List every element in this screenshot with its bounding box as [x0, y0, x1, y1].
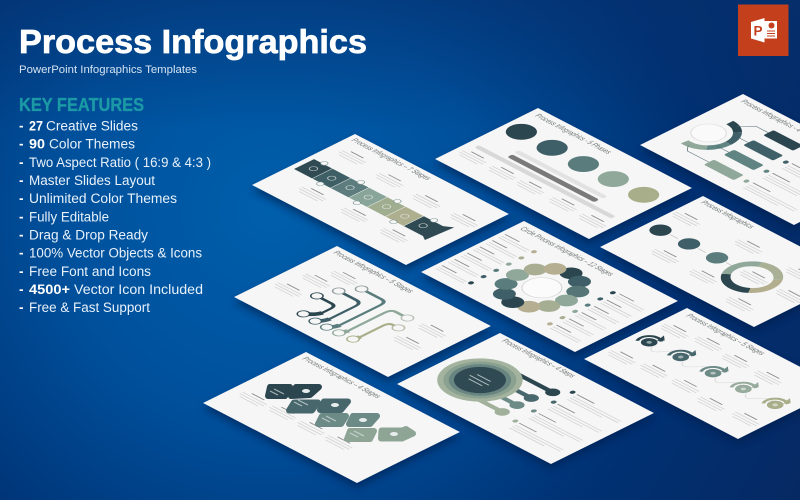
arc diagram — [660, 107, 768, 162]
stage dots — [467, 250, 617, 326]
step band — [290, 157, 454, 241]
feature: color themes: Color Themes — [49, 136, 135, 152]
feature: color themes: 90 — [29, 136, 45, 152]
panel: circle 12 stages slide — [421, 221, 678, 352]
feature: unlimited themes: Unlimited Color Themes — [29, 191, 177, 206]
feature: master slides: - — [19, 173, 24, 188]
slide title: Process Infographics – 4 Stages — [300, 356, 384, 399]
panel: 7 stages slide — [252, 134, 509, 265]
text blocks — [455, 149, 611, 229]
stage icons — [632, 329, 798, 415]
panel: path stages slide — [234, 246, 491, 377]
step boxes — [704, 130, 800, 180]
panel: 5 phases slide — [435, 108, 692, 239]
panel: 4 steps arc slide — [640, 94, 800, 225]
heading: key features: KEY FEATURES — [19, 95, 144, 115]
feature: color themes: - — [19, 136, 24, 152]
feature: drag and drop: Drag & Drop Ready — [29, 228, 148, 242]
slide title: Process Infographics – 5 Stages — [684, 313, 768, 356]
panel: 5 stages icons slide — [584, 308, 800, 439]
feature: vector icons: 4500+ — [29, 282, 70, 297]
feature: free font: - — [19, 264, 24, 279]
text blocks — [605, 320, 800, 429]
feature: aspect ratio: Two Aspect Ratio ( 16:9 & 4:3 ) — [29, 155, 211, 170]
feature list — [19, 118, 211, 315]
feature: editable: Fully Editable — [29, 210, 109, 224]
center circle — [514, 273, 570, 302]
title: Process Infographics — [19, 23, 367, 60]
feature: creative slides: 27 — [29, 118, 43, 134]
feature: creative slides: Creative Slides — [46, 118, 138, 134]
slide title: Process Infographics — [698, 199, 757, 230]
phase circles — [499, 120, 666, 206]
concentric circles — [420, 349, 540, 411]
feature: master slides: Master Slides Layout — [29, 173, 155, 188]
slide title: Process Infographics – 5 Stages — [331, 250, 416, 294]
feature: support: Free & Fast Support — [29, 300, 150, 315]
slide title: Process Infographics - 5 Phases — [533, 113, 615, 155]
icon: powerpoint — [738, 4, 788, 56]
text blocks — [613, 208, 800, 321]
slide title: Process Infographics – 4 Steps — [499, 338, 578, 379]
arms — [454, 365, 563, 420]
feature: free font: Free Font and Icons — [29, 264, 151, 279]
donut chart — [715, 258, 789, 296]
text blocks — [279, 149, 486, 254]
path diagram — [282, 277, 427, 350]
ring of twelve circles — [472, 252, 612, 323]
subtitle: PowerPoint Infographics Templates — [19, 64, 198, 76]
feature: drag and drop: - — [19, 228, 24, 242]
feature: editable: - — [19, 210, 24, 224]
slide title: Process Infographics – 7 Stages — [349, 137, 434, 181]
feature: vector icons — [19, 282, 203, 297]
panel: concentric 4 steps slide — [397, 333, 654, 464]
icon: powerpoint: P — [754, 24, 763, 38]
feature: vector objects: - — [19, 246, 24, 260]
panel: 4 stages tile slide — [203, 352, 460, 483]
feature: aspect ratio: - — [19, 155, 24, 170]
step notes — [503, 390, 627, 453]
slide shadows — [203, 99, 800, 488]
feature: vector objects: 100% Vector Objects & Icons — [29, 246, 202, 260]
tile chain — [268, 387, 413, 439]
phase bars — [474, 137, 631, 219]
feature: vector icons: Vector Icon Included — [74, 282, 203, 297]
feature: creative slides: - — [19, 118, 24, 134]
text blocks — [237, 390, 356, 451]
panel: donut slide — [600, 196, 800, 327]
text blocks — [272, 261, 456, 355]
feature: vector icons: - — [19, 282, 24, 297]
step notes — [737, 150, 800, 213]
slide title: Circle Process Infographics – 12 Stages — [518, 226, 617, 277]
connectors — [648, 342, 774, 407]
feature: support: - — [19, 300, 24, 315]
step circles — [645, 221, 740, 270]
stage notes — [436, 234, 647, 343]
feature: unlimited themes: - — [19, 191, 24, 206]
